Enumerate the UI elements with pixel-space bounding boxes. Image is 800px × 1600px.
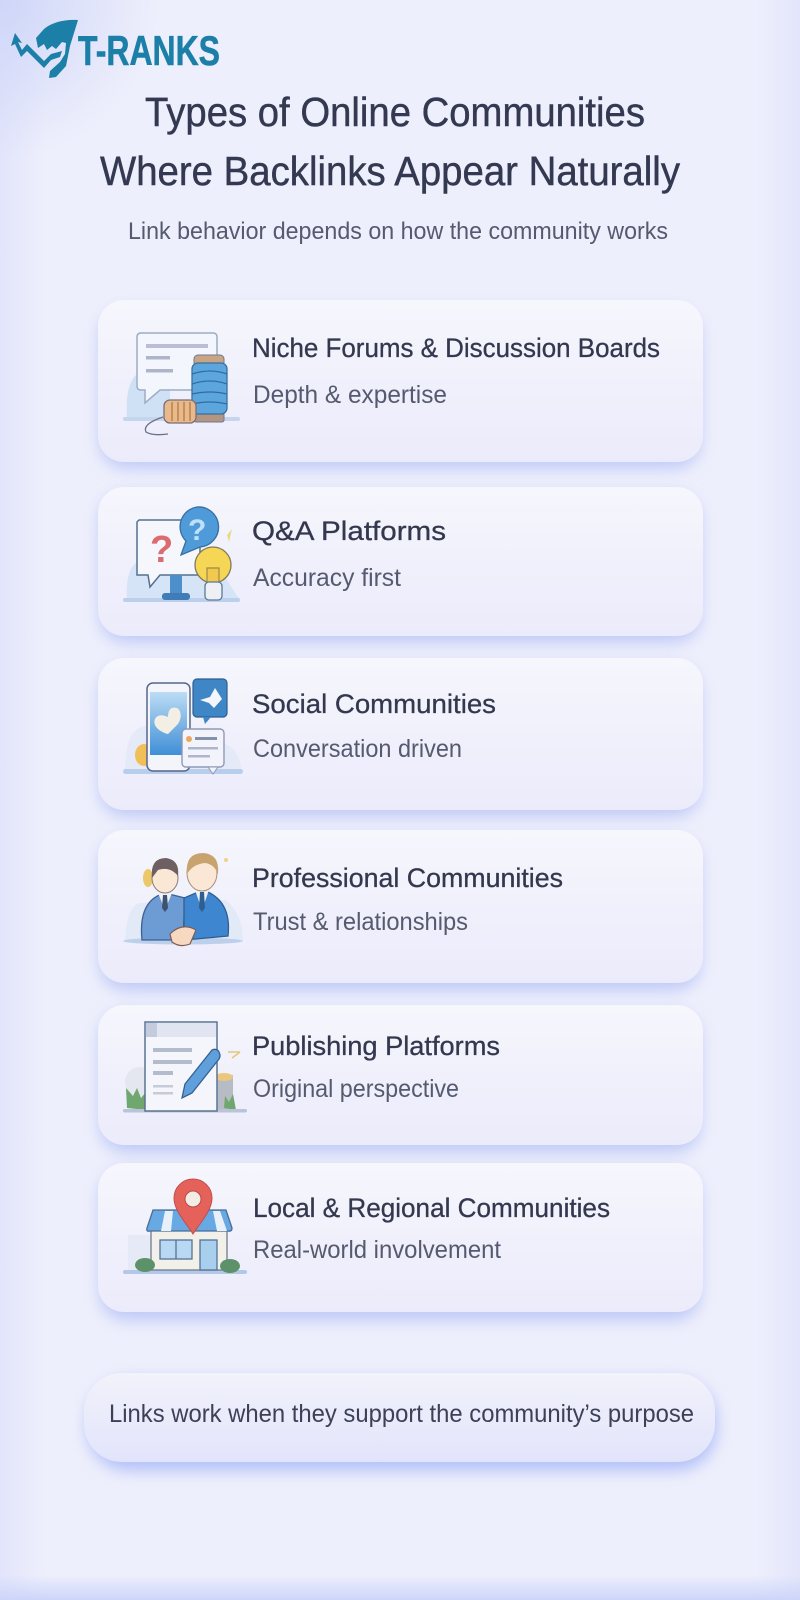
heading: Q&A Platforms <box>252 516 446 546</box>
heading: Social Communities <box>252 689 496 719</box>
icon: monitor, question bubbles and light bulb: ? <box>150 529 173 571</box>
callout: closing message <box>84 1373 716 1470</box>
title: Where Backlinks Appear Naturally <box>100 148 680 194</box>
title <box>100 89 680 194</box>
icon: document with pen <box>123 1022 247 1112</box>
heading: Professional Communities <box>252 863 563 893</box>
heading: Niche Forums & Discussion Boards <box>252 333 660 363</box>
panel: publishing platforms <box>98 1005 703 1152</box>
logo wordmark: T-RANKS <box>78 27 220 74</box>
icon: monitor, question bubbles and light bulb <box>123 507 240 602</box>
heading: Publishing Platforms <box>252 1031 500 1061</box>
icon: shop with location pin <box>123 1179 247 1274</box>
title: Types of Online Communities <box>145 89 645 135</box>
icon: growth arrow and dinosaur <box>11 20 78 78</box>
callout: closing message: Links work when they support the community’s purpose <box>109 1400 694 1428</box>
logo: T-RANKS <box>11 20 220 78</box>
heading: Local & Regional Communities <box>253 1193 610 1223</box>
subheading: Real-world involvement <box>253 1236 501 1264</box>
panel: local and regional communities <box>98 1163 703 1320</box>
icon: two people shaking hands <box>123 853 243 946</box>
subheading: Trust & relationships <box>253 908 468 936</box>
panel: professional communities <box>98 830 703 990</box>
panel: Q&A platforms <box>98 487 703 642</box>
subheading: Conversation driven <box>253 735 462 763</box>
icon: chat bubble and spools <box>123 333 240 435</box>
icon: monitor, question bubbles and light bulb: ? <box>188 514 206 547</box>
subheading: Accuracy first <box>253 564 401 592</box>
subheading: Depth & expertise <box>253 381 447 409</box>
subheading: Original perspective <box>253 1075 459 1103</box>
icon: phone with heart and message bubbles <box>123 679 243 774</box>
panel: social communities <box>98 658 703 816</box>
subtitle: Link behavior depends on how the community works <box>128 218 668 245</box>
panel: niche forums <box>98 300 703 468</box>
